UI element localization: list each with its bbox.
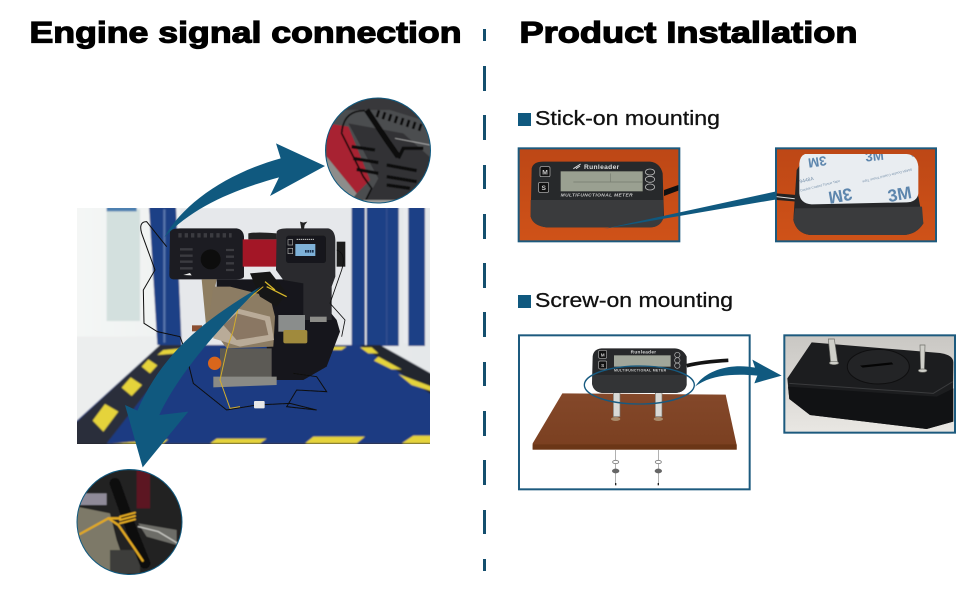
dark rear mass — [217, 279, 340, 380]
arrow: down to lower detail — [125, 287, 261, 467]
photo: meter front on orange background: M — [542, 169, 548, 176]
engine photo — [70, 203, 437, 450]
panel: screw-on diagram: M — [601, 352, 605, 357]
photo: meter front on orange background: S — [541, 185, 546, 192]
panel: screw-on diagram: S — [601, 363, 604, 368]
photo: meter back with screw posts — [784, 335, 955, 433]
wood board — [533, 393, 737, 450]
detail circle: signal wire at air filter — [323, 97, 433, 207]
detail circle: yellow wire on spark lead — [75, 469, 185, 577]
cylinder head — [209, 287, 275, 348]
arrow: screw detail — [695, 360, 782, 387]
panel: screw-on diagram: MULTIFUNCTIONAL METER — [614, 369, 667, 373]
photo: meter back with 3M adhesive: 3M — [807, 153, 828, 171]
subheading: Stick-on mounting: Stick-on mounting — [535, 108, 720, 130]
meter on engine — [286, 236, 326, 263]
wires — [141, 222, 345, 410]
photo: meter front on orange background: Runleader — [584, 164, 620, 171]
engine body — [169, 228, 244, 279]
photo: meter back with 3M adhesive: 3M — [827, 184, 854, 208]
yellow hazard marks — [93, 347, 433, 443]
washers, nuts and screws — [612, 450, 662, 485]
mounting posts — [613, 392, 662, 417]
panel: screw-on diagram — [519, 335, 750, 489]
highlight ellipse — [584, 366, 694, 404]
photo: meter back with 3M adhesive — [776, 148, 936, 241]
subheading: Screw-on mounting: Screw-on mounting — [535, 290, 733, 312]
title: Engine signal connection: Engine signal connection — [30, 16, 462, 50]
photo: meter front on orange background: MULTIFUNCTIONAL METER — [561, 193, 633, 199]
dashed divider — [483, 29, 486, 571]
title: Product Installation: Product Installation — [520, 16, 858, 50]
arrow: stick-on connector line — [603, 192, 777, 229]
photo: meter back with 3M adhesive: 3M — [865, 148, 885, 165]
meter — [592, 348, 687, 393]
tan bracket — [202, 279, 217, 325]
platform — [70, 345, 437, 443]
photo: meter back with 3M adhesive: 9448A — [799, 176, 815, 185]
photo: meter back with 3M adhesive: 3 — [910, 148, 917, 159]
photo: meter back with 3M adhesive: 9448A Double Coated Tissue Tape — [862, 167, 912, 184]
arrow: up to upper detail — [164, 143, 325, 237]
photo: meter back with 3M adhesive: 3M — [886, 182, 913, 206]
blue rack frame — [149, 207, 425, 346]
panel: screw-on diagram: Runleader — [631, 349, 656, 354]
photo: meter back with 3M adhesive: Double Coated Tissue Tape — [800, 179, 841, 193]
cable — [687, 360, 728, 366]
photo: meter front on orange background — [519, 148, 679, 241]
